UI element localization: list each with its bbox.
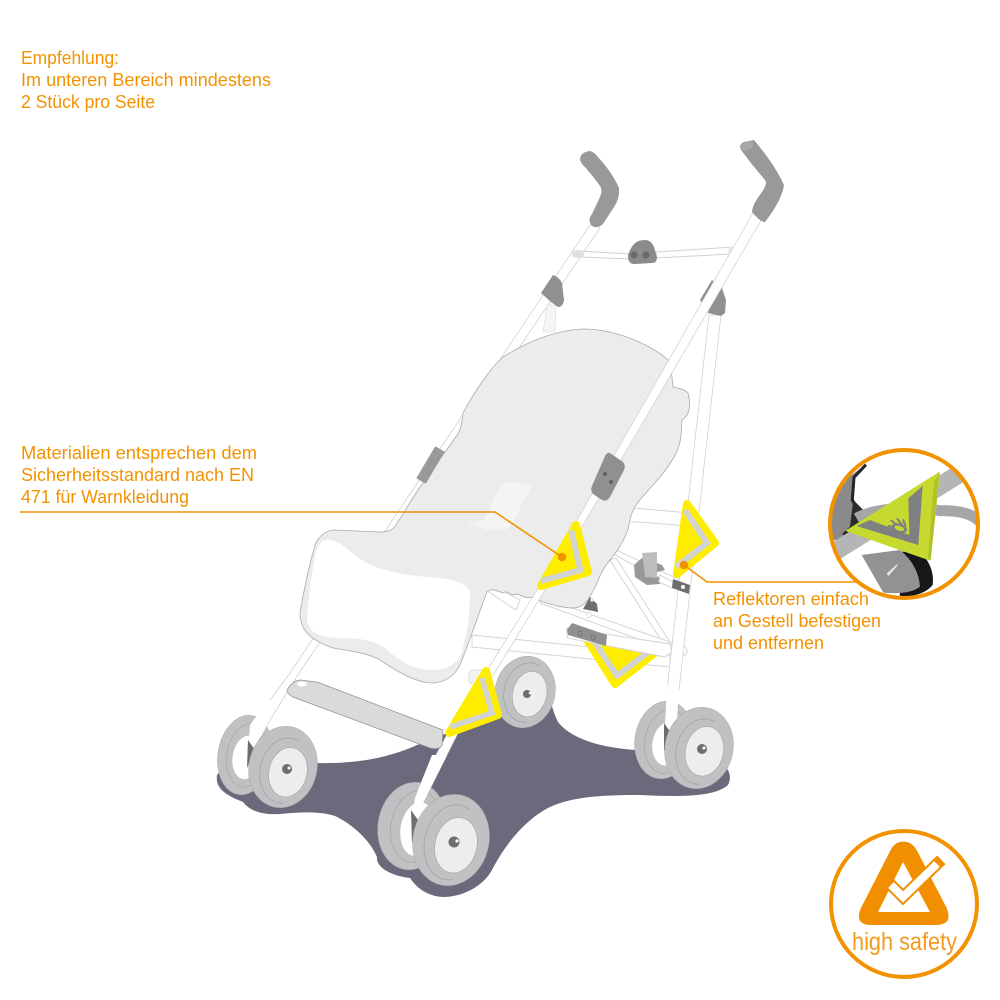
- callout line and dot: reflectors: [680, 561, 860, 582]
- right joint back: [700, 280, 726, 316]
- text: recommendation: Im unteren Bereich mindestens: [21, 69, 271, 90]
- photo: hand icon: [889, 519, 908, 535]
- main tube: [413, 213, 763, 815]
- photo: diagonal tube: [827, 473, 960, 557]
- joint dot: [677, 646, 687, 656]
- badge label: high safety: [852, 928, 957, 956]
- bracket: [672, 579, 690, 594]
- right vertical tube: [667, 315, 721, 690]
- reflector: bottom left: [449, 671, 498, 733]
- seat belt highlight: [466, 482, 531, 530]
- photo: wheel: [897, 552, 933, 597]
- left handle: [580, 151, 619, 227]
- stroller frame: [250, 139, 784, 815]
- cup holder: [634, 552, 673, 588]
- text: recommendation: Empfehlung:: [21, 47, 119, 68]
- text: materials: 471 für Warnkleidung: [21, 486, 189, 507]
- text: materials: Sicherheitsstandard nach EN: [21, 464, 254, 485]
- rear lower frame bars: [472, 508, 690, 667]
- photo: seat edge: [828, 464, 867, 540]
- lower long bar: [567, 628, 672, 657]
- ground shadow: [217, 700, 730, 897]
- photo: reflector triangle: [847, 473, 939, 560]
- left side clasp: [421, 449, 440, 481]
- wheels: front pair: [371, 755, 498, 893]
- clasp: [567, 623, 607, 646]
- tube clasp: [591, 453, 625, 501]
- right handle: [739, 139, 784, 222]
- detail photo circle: [827, 450, 980, 598]
- text: recommendation: [21, 47, 271, 112]
- reflector: on seat: [541, 525, 588, 586]
- badge triangle: [859, 842, 948, 925]
- text: reflectors: und entfernen: [713, 632, 824, 653]
- text: recommendation: 2 Stück pro Seite: [21, 91, 155, 112]
- badge: high safety: [831, 831, 977, 977]
- wheels: left pair: [211, 700, 325, 815]
- badge check mark: [891, 864, 937, 897]
- seat base highlight: [307, 540, 470, 670]
- small seat bracket: [583, 597, 598, 612]
- centre piece: [628, 240, 657, 264]
- footrest: [287, 680, 443, 749]
- text: reflectors: an Gestell befestigen: [713, 610, 881, 631]
- reflector: right frame: [676, 504, 715, 574]
- text: materials: Materialien entsprechen dem: [21, 442, 257, 463]
- callout line and dot: materials: [20, 512, 566, 561]
- lower triangle reflector: [586, 638, 656, 684]
- upper cross bar: [580, 251, 630, 259]
- seat: [300, 329, 690, 683]
- text: materials: [21, 442, 257, 507]
- joint stub below seat: [469, 670, 487, 684]
- wheels: right pair: [629, 685, 741, 796]
- text: reflectors: [713, 588, 881, 653]
- text: reflectors: Reflektoren einfach: [713, 588, 869, 609]
- left tube: [250, 222, 600, 740]
- wheel: middle: [488, 650, 562, 734]
- photo: horizontal tube: [857, 508, 980, 522]
- left joint: [541, 275, 564, 332]
